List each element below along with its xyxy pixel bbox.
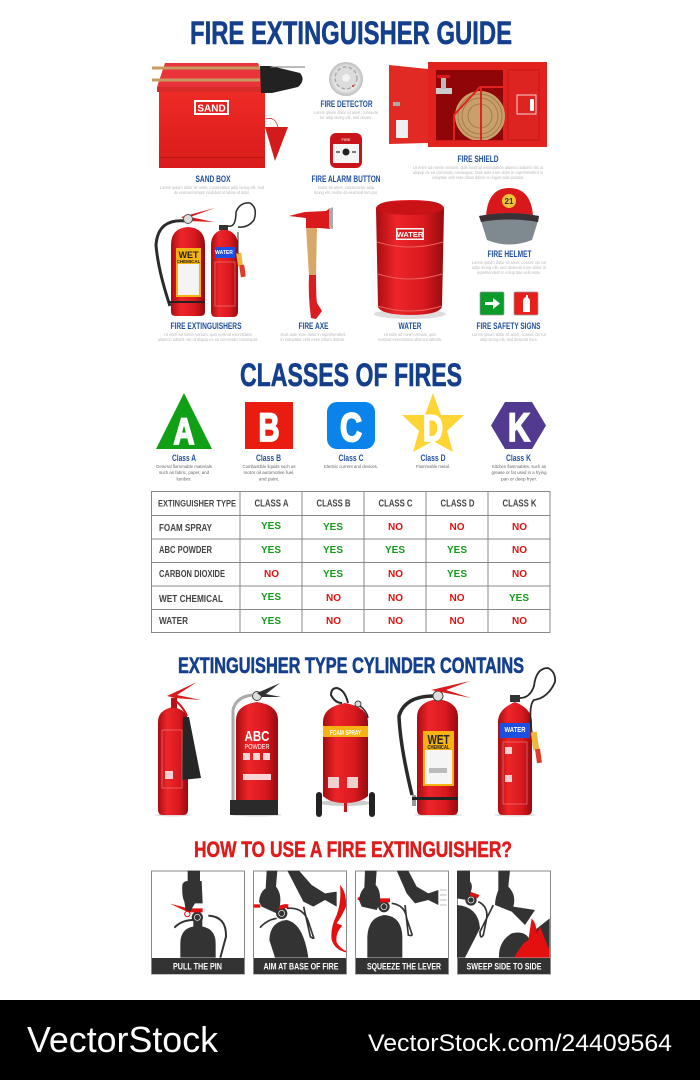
row: carbon dioxide: YES [323,569,343,580]
description: class K: Kitchen flammables, such as [492,464,547,469]
description: class K [492,464,547,482]
row: foam spray [159,521,527,534]
panel: pull the pin [152,871,244,974]
icon: alarm button: FIRE [341,137,351,142]
cylinder: abc powder [230,683,282,816]
description: fire axe: Duis aute irure dolor in reprehenderit [280,332,346,337]
description: fire extinguishers: ullamco laboris nisi ut aliquip ex ea commodo consequat. [158,337,258,342]
row: foam spray: YES [261,521,281,532]
description: fire shield: Ut enim ad minim veniam, quis nostrud exercitation ullamco laboris nisi ut [413,165,544,170]
description: class A: lumber. [176,476,192,482]
description: fire alarm button [314,185,378,195]
row: foam spray: NO [388,522,403,533]
class C [324,402,378,469]
caption: sweep side to side: SWEEP SIDE TO SIDE [466,962,542,972]
cylinder: abc powder: POWDER [244,744,270,751]
illustration: aim at base of fire [254,871,346,958]
icon: two extinguishers: CHEMICAL [177,259,201,264]
description: fire alarm button: iscing elit, sedim do eiusmod tem por. [314,190,378,195]
panel: sweep side to side [457,871,550,974]
item: water barrel [374,200,446,342]
row: wet chemical: NO [388,593,403,604]
description: fire detector [314,110,379,120]
description: fire axe [280,332,346,342]
label: class K: Class K [506,453,531,463]
cylinder: wet chemical: WET [428,732,450,747]
row: abc powder: YES [385,545,405,556]
row: water: NO [326,616,341,627]
description: sand box: do eiusmod tempor incididunt ut labore et dolor. [174,190,250,195]
description: fire safety signs [472,332,547,342]
description: fire safety signs: adip iscing elit, sed deseunt irure. [480,337,538,342]
illustration: pull the pin [170,871,226,958]
description: fire axe: in voluptate velit esse cillum dolore. [280,337,346,342]
row: abc powder: YES [261,545,281,556]
table header: CLASS C [378,498,412,510]
icon: axe [289,207,333,319]
table header [158,498,537,510]
caption: pull the pin: PULL THE PIN [173,962,222,972]
row: abc powder: NO [512,545,527,556]
description: class A [156,464,213,482]
icon: hose cabinet [389,62,547,147]
row: foam spray: NO [450,522,465,533]
row: foam spray: FOAM SPRAY [159,523,212,534]
description: fire detector: tur adip iscing elit, sed doves. [320,115,372,120]
description: sand box: Lorem ipsum dolor sit amet, consectetur adip iscing elit, sed [160,185,265,190]
icon: smoke detector [329,62,363,96]
letter A: A [174,411,194,452]
label: fire helmet: FIRE HELMET [488,249,532,259]
icon: sand box [152,63,305,168]
row: water: NO [450,616,465,627]
cylinder: wet chemical: CHEMICAL [428,745,450,751]
icon: green triangle [156,393,212,449]
icon: two extinguishers: WET [178,250,199,260]
brand: VectorStock: VectorStock [27,1019,219,1060]
description: water: nostrud exercitation ullamco laboris. [378,337,442,342]
letter D: D [423,408,443,449]
cylinder: foam spray: FOAM SPRAY [330,730,361,737]
description: class C: Electric current and devices. [324,464,378,469]
row: water: NO [388,616,403,627]
description: fire detector: Lorem ipsum dolor sit amet, consecte [314,110,379,115]
cylinder: water [494,668,555,816]
row: abc powder: YES [447,545,467,556]
description: class B: and paint. [259,476,279,482]
label: water: WATER [398,321,422,331]
item: fire shield [389,62,547,180]
letter C: C [340,406,362,450]
icon: yellow star [402,393,464,452]
panel: aim at base of fire [254,871,346,974]
cylinder: abc powder: ABC [244,728,270,745]
icon: purple hexagon [491,402,546,449]
class D [402,393,464,469]
caption: squeeze the lever: SQUEEZE THE LEVER [367,962,441,972]
letter B: B [258,406,280,450]
description: fire shield: voluptate velit esse cillum dolore eu fugiat nulla pariatur. [432,175,524,180]
icon: red square [245,402,293,449]
row: water [159,616,527,627]
cylinder: wet chemical [399,681,471,816]
icon: barrel: WATER [397,230,424,239]
description: class A: General flammable materials [156,464,213,469]
description: fire shield [413,165,544,180]
row: carbon dioxide: NO [512,569,527,580]
description: fire extinguishers: Ut enim ad minim veniam, quis nostrud exercitation [164,332,253,337]
item: fire extinguishers [156,203,258,342]
row: abc powder: ABC POWDER [159,545,213,556]
item: fire axe [280,207,346,342]
icon: helmet: 21 [505,197,514,206]
item: sand box [152,63,305,195]
description: water [378,332,442,342]
description: class B [242,464,296,482]
label: class C: Class C [338,453,364,463]
illustration: squeeze the lever [358,871,447,958]
row: water: WATER [159,616,189,627]
row: carbon dioxide: NO [388,569,403,580]
label: fire shield: FIRE SHIELD [458,154,499,164]
table header: CLASS B [316,498,350,510]
label: class D: Class D [420,453,446,463]
label: fire safety signs: FIRE SAFETY SIGNS [476,321,540,331]
title: FIRE EXTINGUISHER GUIDE [190,15,512,51]
heading: cylinder contents: EXTINGUISHER TYPE CYLINDER CONTAINS [178,653,524,678]
letter K: K [508,406,530,450]
item: fire safety signs [472,292,547,342]
description: fire alarm button: Dolor sit amet, consectetur adip [318,185,375,190]
row: foam spray: NO [512,522,527,533]
description: sand box [160,185,265,195]
row: abc powder [159,545,527,556]
description: class B: motor oil automotive fuel, [244,470,294,475]
icon: extinguisher sign [514,292,538,315]
label: fire axe: FIRE AXE [298,321,328,331]
description: fire shield: aliquip ex ea commodo consequat. Duis aute irure dolor in reprehenderit in [413,170,544,175]
item: fire alarm button [312,133,380,195]
image url: VectorStock.com/24409564 [368,1030,672,1057]
label: fire alarm button: FIRE ALARM BUTTON [312,174,380,184]
row: water: NO [512,616,527,627]
table header: EXTINGUISHER TYPE [158,498,236,508]
label: fire detector: FIRE DETECTOR [320,99,373,109]
table: extinguisher type vs class [151,491,550,632]
icon: two extinguishers: WATER [215,250,233,256]
label: class A: Class A [172,453,196,463]
class B [242,402,296,482]
item: fire helmet [472,188,547,275]
row: wet chemical: WET CHEMICAL [159,594,223,605]
description: water: Ut enim ad minim veniam, quis [384,332,436,337]
footer band [0,1000,700,1080]
description: class K: grease or fat used in a frying [492,470,547,475]
row: water: YES [261,616,281,627]
class K [491,402,547,482]
row: wet chemical: NO [450,593,465,604]
row: carbon dioxide: CARBON DIOXIDE [159,569,225,580]
row: foam spray: YES [323,522,343,533]
description: fire helmet: Lorem ipsum dolor sit amet, consec cte tur [472,260,547,265]
row: wet chemical: YES [509,593,529,604]
row: wet chemical: NO [326,593,341,604]
icon: two extinguishers [156,203,255,317]
panel: squeeze the lever [356,871,448,974]
class A [156,393,213,482]
row: wet chemical: YES [261,592,281,603]
caption: aim at base of fire: AIM AT BASE OF FIRE [264,962,338,972]
table header: CLASS D [440,498,474,510]
cylinder: foam spray [316,688,375,817]
description: class A: such as fabric, paper, and [159,470,209,475]
icon: exit sign [480,292,504,315]
table header: CLASS A [254,498,288,510]
row: wet chemical [159,592,529,605]
illustration: sweep side to side [457,871,550,958]
row: abc powder: YES [323,545,343,556]
row: carbon dioxide: YES [447,569,467,580]
icon: sand box: SAND [197,104,226,114]
description: class D: Flammable metal. [416,464,450,469]
row: carbon dioxide: NO [264,569,279,580]
description: fire extinguishers [158,332,258,342]
heading: classes of fires: CLASSES OF FIRES [240,357,462,393]
description: fire helmet: adip iscing elit, sed deseunt irure dolor in [472,265,547,270]
description: class K: pan or deep fryer. [501,476,537,482]
item: fire detector [314,62,379,120]
icon: barrel [374,200,446,319]
icon: blue rounded square [327,402,375,449]
row: carbon dioxide [159,569,527,580]
description: class B: Combustible liquids such as [242,464,296,469]
label: class B: Class B [256,453,281,463]
table header: CLASS K [502,498,537,510]
cylinder: carbon dioxide [155,682,201,816]
heading: how to use: HOW TO USE A FIRE EXTINGUISHER? [194,837,512,862]
label: sand box: SAND BOX [196,174,230,184]
description: fire helmet: reprehenderit in volup tate velit esse. [477,270,541,275]
label: fire extinguishers: FIRE EXTINGUISHERS [170,321,242,331]
description: fire safety signs: Lorem ipsum dolor sit amet, consec cte tur [472,332,547,337]
description: fire helmet [472,260,547,275]
cylinder: water: WATER [504,727,526,734]
